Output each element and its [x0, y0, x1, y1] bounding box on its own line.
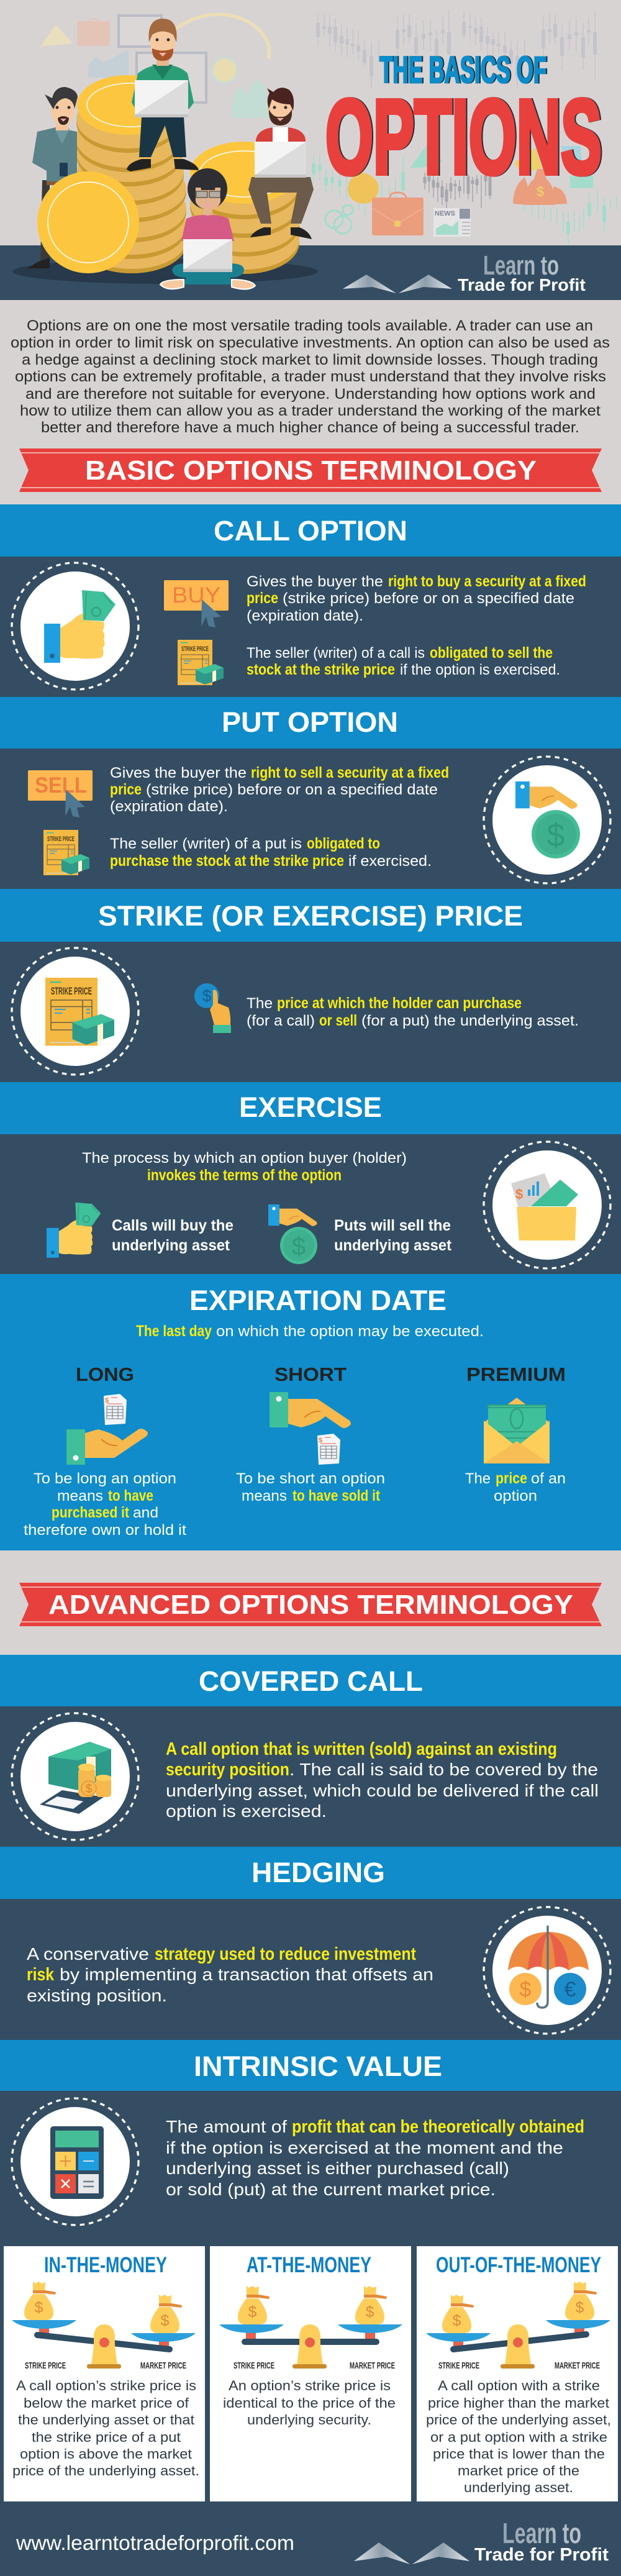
- column: premium: PREMIUM: [466, 1363, 566, 1385]
- scale illustration: [426, 2282, 610, 2369]
- column: long: to have: [108, 1487, 153, 1504]
- expiration definition: on which the option may be executed.: [216, 1323, 484, 1340]
- intrinsic value text: profit that can be theoretically obtained: [292, 2117, 584, 2137]
- intrinsic value text: if the option is exercised at the moment and the: [166, 2138, 563, 2157]
- covered call text: underlying asset, which could be delivered if the call: [166, 1781, 599, 1800]
- exercise definition: invokes the terms of the option: [147, 1167, 342, 1184]
- call text: right to buy: price: [247, 589, 278, 607]
- card: out-of-the-money: market price of the: [458, 2463, 579, 2478]
- intrinsic value text: The amount of: [166, 2117, 287, 2136]
- column: premium: [465, 1363, 566, 1504]
- puts text: Puts will sell the: [334, 1217, 451, 1234]
- coins: right stack: [190, 142, 299, 274]
- column: premium: of an: [531, 1470, 566, 1487]
- heading: covered call: COVERED CALL: [199, 1665, 423, 1697]
- call text: right to buy: right to buy a security at a fixed: [388, 573, 586, 590]
- column: long: LONG: [76, 1363, 134, 1385]
- icon: strike price document: [178, 640, 224, 685]
- column: long: and: [133, 1504, 158, 1521]
- column: short: means: [242, 1488, 287, 1504]
- column: long: therefore own or hold it: [24, 1522, 186, 1539]
- covered call text: . The call is said to be covered by the: [289, 1760, 598, 1779]
- icon: hand giving coin: $: [547, 817, 565, 853]
- icon: hand giving coin: [484, 757, 610, 883]
- card: out-of-the-money: A call option with a strike: [438, 2378, 600, 2393]
- put text: right to sell: (strike price) before or on a specified date: [146, 781, 438, 798]
- card: in-the-money: [4, 2246, 205, 2501]
- dark ground band: [0, 245, 621, 300]
- coins: main stack: [76, 75, 186, 273]
- icon: hand dropping receipt: [270, 1392, 351, 1465]
- icon: strike price document: STRIKE PRICE: [47, 835, 75, 843]
- card: at-the-money: MARKET PRICE: [350, 2360, 395, 2371]
- panel: intrinsic value: [0, 2040, 621, 2576]
- column: short: SHORT: [274, 1363, 347, 1385]
- hedging text: [27, 1944, 433, 2005]
- column: long: purchased it: [52, 1504, 130, 1521]
- intrinsic value text: underlying asset is either purchased (call): [166, 2159, 509, 2178]
- intro paragraph: a hedge against a declining stock market to limit downside losses. Though trading: [22, 352, 598, 368]
- card: in-the-money: MARKET PRICE: [140, 2360, 186, 2371]
- column: short: to have sold it: [292, 1487, 381, 1504]
- panel: covered call: [0, 1655, 621, 1847]
- card: out-of-the-money: price that is lower than the: [433, 2446, 605, 2462]
- covered call text: security position: [166, 1760, 289, 1780]
- card: in-the-money: option is above the market: [20, 2446, 192, 2462]
- panel: expiration date: [0, 1274, 621, 1550]
- hedging text: strategy used to reduce investment: [155, 1944, 416, 1964]
- puts text: underlying asset: [334, 1237, 452, 1254]
- panel: hedging: [0, 1847, 621, 2040]
- strike text: The: [247, 995, 273, 1012]
- icon: open hand with receipt: [66, 1394, 148, 1465]
- faded background icons: $: [537, 184, 544, 199]
- banner: basic options terminology: BASIC OPTIONS TERMINOLOGY: [85, 455, 537, 486]
- put text: right to sell: (expiration date).: [110, 798, 228, 815]
- card: at-the-money: AT-THE-MONEY: [247, 2253, 371, 2277]
- icon: hand with coin: [268, 1204, 317, 1264]
- column: short: To be short an option: [236, 1470, 385, 1487]
- icon: hand with money: [47, 1203, 101, 1258]
- calls text: [112, 1217, 233, 1254]
- put text: right to sell: [110, 764, 449, 815]
- column: premium: The: [465, 1470, 491, 1487]
- faded background icons: [40, 11, 617, 244]
- card: out-of-the-money: underlying asset.: [464, 2480, 573, 2495]
- logo: Trade for Profit: [458, 275, 586, 294]
- icon: hand with coin: $: [292, 1233, 306, 1260]
- strike text: price at which the holder can purchase: [277, 994, 522, 1012]
- card: out-of-the-money: price higher than the market: [428, 2395, 609, 2411]
- strike text: or sell: [319, 1012, 357, 1029]
- put text: obligation: obligated to: [307, 835, 380, 852]
- footer website url: www.learntotradeforprofit.com: [16, 2531, 294, 2554]
- card: at-the-money: underlying security.: [247, 2412, 371, 2428]
- puts text: [334, 1217, 452, 1254]
- panel: call option: [0, 504, 621, 697]
- calls text: underlying asset: [112, 1237, 230, 1254]
- put text: right to sell: Gives the buyer the: [110, 765, 247, 781]
- exercise definition: The process by which an option buyer (holder): [82, 1150, 407, 1167]
- heading: call option: CALL OPTION: [214, 515, 407, 547]
- icon: calculator: [12, 2098, 138, 2225]
- icon: envelope with money: [484, 1398, 550, 1463]
- column: short: [236, 1363, 385, 1504]
- column: premium: option: [494, 1488, 537, 1504]
- heading: expiration date: EXPIRATION DATE: [189, 1285, 446, 1316]
- call text: obligation: The seller (writer) of a call is: [247, 645, 425, 662]
- card: in-the-money: A call option’s strike price is: [16, 2378, 196, 2393]
- scale illustration: [219, 2286, 402, 2369]
- logo: [343, 250, 586, 294]
- icon: sell button: SELL: [35, 773, 87, 798]
- strike text: (for a call): [247, 1013, 315, 1029]
- footer logo: [354, 2517, 609, 2565]
- intro paragraph: options can be extremely profitable, a trader must understand that they involve risks: [15, 368, 606, 385]
- panel: strike price: [0, 889, 621, 1082]
- card: out-of-the-money: or a put option with a strike: [430, 2429, 607, 2445]
- icon: finger on coin: [194, 983, 231, 1033]
- call text: obligation: stock at the strike price: [247, 661, 395, 678]
- card: at-the-money: [210, 2246, 411, 2501]
- heading: put option: PUT OPTION: [222, 706, 398, 738]
- column: long: To be long an option: [34, 1470, 176, 1487]
- put text: obligation: [110, 835, 432, 870]
- banner: basic options terminology: [19, 448, 602, 492]
- icon: umbrella over coins: €: [564, 1978, 576, 2001]
- heading: intrinsic value: INTRINSIC VALUE: [194, 2050, 442, 2082]
- card: in-the-money: STRIKE PRICE: [25, 2360, 66, 2371]
- put text: right to sell: price: [110, 781, 142, 798]
- large front coin: [37, 171, 139, 273]
- icon: buy button: BUY: [172, 583, 220, 608]
- call text: right to buy: [247, 573, 586, 624]
- header hero: [0, 11, 621, 300]
- faded background icons: NEWS: [435, 210, 455, 217]
- call text: right to buy: (strike price) before or on a specified date: [283, 590, 574, 607]
- icon: umbrella over coins: [484, 1907, 610, 2034]
- covered call text: A call option that is written (sold) against an existing: [166, 1739, 557, 1759]
- intro paragraph: [11, 317, 610, 436]
- put text: obligation: if exercised.: [348, 853, 432, 870]
- column: long: means: [57, 1488, 103, 1504]
- strike text: [247, 994, 579, 1029]
- call text: obligation: [247, 644, 560, 678]
- card: out-of-the-money: [417, 2246, 618, 2501]
- card: in-the-money: the strike price of a put: [32, 2429, 181, 2445]
- heading: hedging: HEDGING: [252, 1857, 385, 1888]
- card: out-of-the-money: STRIKE PRICE: [438, 2360, 479, 2371]
- heading: strike price: STRIKE (OR EXERCISE) PRICE: [98, 900, 523, 932]
- icon: umbrella over coins: $: [520, 1978, 532, 2001]
- hedging text: by implementing a transaction that offsets an: [60, 1965, 433, 1984]
- icon: strike price document: [43, 830, 89, 875]
- put text: right to sell: right to sell a security at a fixed: [251, 764, 449, 781]
- covered call text: option is exercised.: [166, 1801, 327, 1821]
- panel: put option: [0, 697, 621, 889]
- icon: large strike price document: STRIKE PRICE: [51, 986, 92, 997]
- calls text: Calls will buy the: [112, 1217, 233, 1234]
- intrinsic value text: [166, 2117, 584, 2199]
- person: woman with laptop: [160, 168, 255, 289]
- icon: finger on coin: $: [202, 986, 212, 1005]
- icon: money stack and coins: $: [86, 1783, 93, 1796]
- panel: exercise: [0, 1082, 621, 1274]
- footer logo: Learn to: [502, 2517, 581, 2549]
- banner: advanced options terminology: ADVANCED OPTIONS TERMINOLOGY: [48, 1590, 573, 1620]
- person: man on top: [127, 19, 199, 171]
- card: in-the-money: below the market price of: [24, 2395, 189, 2411]
- exercise definition: [82, 1150, 407, 1184]
- expiration definition: [136, 1322, 484, 1340]
- put text: obligation: The seller (writer) of a put is: [110, 835, 302, 852]
- intro paragraph: how to utilize them can allow you as a trader understand the working of the market: [20, 403, 601, 419]
- call text: obligation: obligated to sell the: [430, 644, 553, 662]
- call text: right to buy: Gives the buyer the: [247, 573, 383, 590]
- hedging text: risk: [27, 1965, 55, 1985]
- call text: right to buy: (expiration date).: [247, 608, 363, 624]
- icon: hand holding money: [12, 563, 138, 690]
- strike text: (for a put) the underlying asset.: [361, 1013, 579, 1029]
- call text: obligation: if the option is exercised.: [400, 662, 560, 678]
- card: in-the-money: price of the underlying asset.: [12, 2463, 199, 2478]
- icon: buy button: [164, 580, 229, 627]
- icon: folder with papers: $: [515, 1186, 523, 1202]
- card: in-the-money: IN-THE-MONEY: [44, 2253, 167, 2277]
- icon: strike price document: STRIKE PRICE: [181, 645, 209, 653]
- person: left man: [27, 87, 78, 268]
- person: man on right stack: [248, 88, 314, 239]
- footer logo: Trade for Profit: [474, 2545, 609, 2565]
- column: premium: price: [496, 1470, 527, 1487]
- intrinsic value text: or sold (put) at the current market price.: [166, 2180, 496, 2199]
- expiration definition: The last day: [136, 1322, 212, 1340]
- icon: money stack and coins: [12, 1713, 138, 1840]
- card: in-the-money: the underlying asset or that: [18, 2412, 194, 2428]
- intro paragraph: and are therefore not suitable for everyone. Understanding how options work and: [25, 386, 596, 403]
- column: long: [24, 1363, 186, 1539]
- icon: folder with papers: [484, 1142, 610, 1268]
- logo: Learn to: [483, 250, 559, 281]
- put text: obligation: purchase the stock at the strike price: [110, 852, 344, 870]
- icon: large strike price document: [12, 948, 138, 1075]
- card: at-the-money: STRIKE PRICE: [233, 2360, 274, 2371]
- heading: exercise: EXERCISE: [239, 1091, 382, 1123]
- card: at-the-money: identical to the price of the: [223, 2395, 396, 2411]
- intro paragraph: option in order to limit risk on speculative investments. An option can also be used as: [11, 334, 610, 352]
- banner: advanced options terminology: [19, 1583, 602, 1626]
- covered call text: [166, 1739, 599, 1821]
- icon: sell button: [28, 770, 93, 817]
- intro paragraph: Options are on one the most versatile trading tools available. A trader can use an: [27, 317, 593, 334]
- intro paragraph: better and therefore have a much higher chance of being a successful trader.: [41, 419, 579, 436]
- card: out-of-the-money: price of the underlying asset,: [426, 2412, 611, 2428]
- hedging text: A conservative: [27, 1944, 149, 1964]
- card: at-the-money: An option’s strike price is: [229, 2378, 391, 2393]
- scale illustration: [12, 2282, 196, 2369]
- hedging text: existing position.: [27, 1986, 167, 2005]
